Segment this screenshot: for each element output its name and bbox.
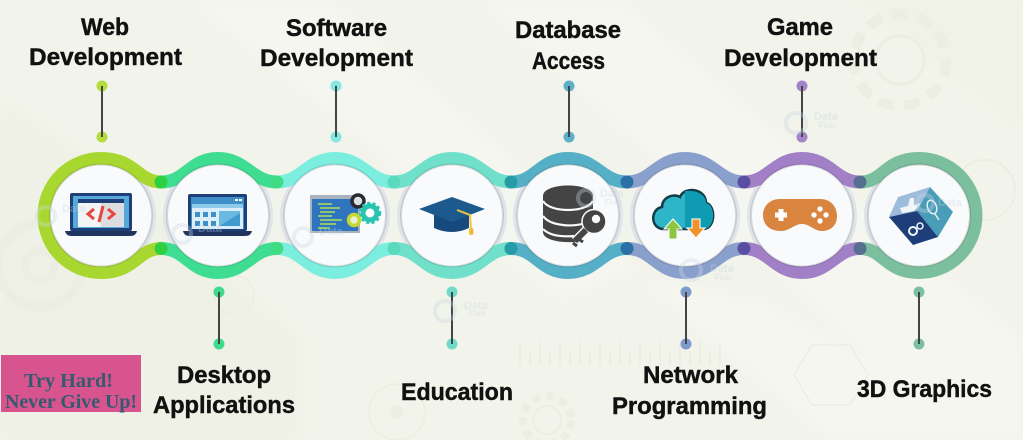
title label: Game Development: Development [724, 45, 877, 72]
title label: Web Development: Web [81, 14, 129, 41]
title label: Software Development [260, 15, 413, 72]
connector: Software Development [330, 80, 342, 142]
title label: Software Development: Development [260, 45, 413, 72]
title label: Network Programming: Programming [612, 393, 767, 420]
icon: cloud with up and down arrows [653, 190, 713, 239]
watermarks: DataFlair: Data [938, 197, 963, 209]
watermarks: DataFlair: Flair [605, 198, 622, 207]
title label: Game Development [724, 14, 877, 72]
title label: Web Development: Development [29, 44, 182, 71]
icon: graduation cap [419, 197, 485, 235]
title label: Software Development: Software [286, 15, 387, 42]
title label: Game Development: Game [767, 14, 833, 41]
title label: Desktop Applications [153, 362, 295, 419]
watermarks: DataFlair: Data [710, 263, 735, 275]
icon: laptop with code [65, 193, 137, 236]
watermarks: DataFlair: Data [62, 203, 87, 215]
title label: Network Programming [612, 362, 767, 420]
icon: game controller [763, 199, 837, 231]
title label: Network Programming: Network [643, 362, 739, 389]
connector: Database Access [564, 80, 574, 142]
icon: database with key [543, 186, 606, 246]
title label: Education: Education [401, 379, 513, 406]
icon: laptop with app window [183, 194, 252, 236]
connector: 3D Graphics [914, 286, 924, 350]
title label: Database Access: Database [515, 17, 621, 44]
title label: Web Development [29, 14, 182, 71]
watermarks: DataFlair: Data [464, 300, 489, 312]
title label: 3D Graphics: 3D Graphics [857, 376, 992, 403]
title label: Database Access: Access [532, 48, 605, 75]
chain of linked rings [44, 158, 976, 272]
watermarks: DataFlair: Flair [819, 121, 836, 130]
title label: Database Access [515, 17, 621, 75]
watermarks: DataFlair: Data [814, 111, 839, 123]
title label: Desktop Applications: Applications [153, 392, 295, 419]
connector: Web Development [96, 80, 108, 142]
watermarks: DataFlair: Data [319, 226, 344, 238]
connector: Education [446, 286, 458, 350]
connector: Game Development [796, 80, 808, 142]
icon: 3D cube [889, 187, 953, 245]
watermarks: DataFlair: Flair [469, 309, 486, 318]
callout: Try Hard! Never Give Up!: Never Give Up! [5, 391, 137, 413]
icon: code window with gears [310, 195, 380, 233]
callout: Try Hard! Never Give Up!: Try Hard! [24, 370, 113, 392]
callout: Try Hard! Never Give Up! [1, 355, 141, 413]
watermarks: DataFlair [37, 111, 963, 321]
connector: Desktop Applications [214, 286, 224, 350]
watermarks: DataFlair: Data [198, 223, 223, 235]
watermarks: DataFlair: Flair [715, 273, 732, 282]
watermarks: DataFlair: Data [600, 188, 625, 200]
connector: Network Programming [680, 286, 692, 350]
title label: Desktop Applications: Desktop [177, 362, 271, 389]
